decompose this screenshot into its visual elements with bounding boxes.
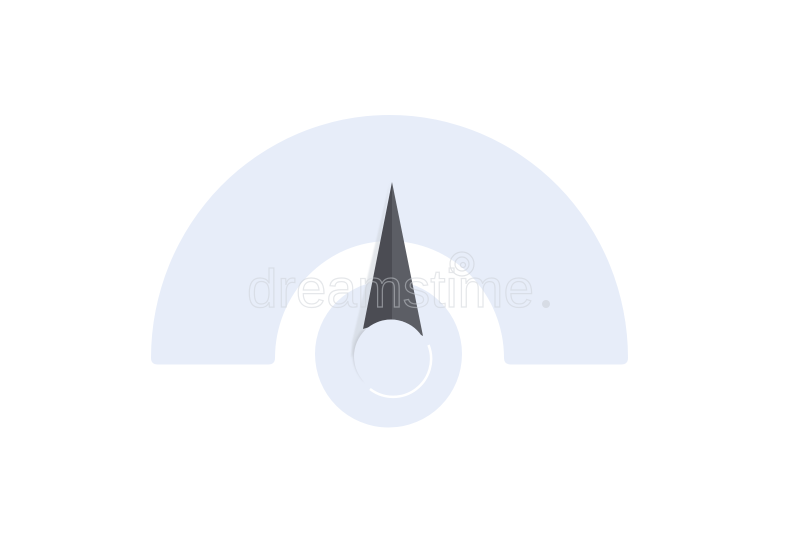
watermark registered mark — [450, 252, 474, 276]
watermark — [247, 252, 550, 319]
hub left shadow — [353, 330, 368, 381]
hub highlight ring — [370, 345, 431, 397]
watermark dot — [542, 300, 550, 308]
hub inner disc — [354, 320, 428, 394]
needle left face — [363, 182, 392, 329]
needle shadow — [351, 182, 390, 358]
needle right face — [392, 182, 423, 336]
hub outer disc — [315, 280, 462, 428]
needle — [363, 182, 423, 336]
gauge arc band — [151, 115, 628, 364]
watermark text: dreamstime — [247, 259, 534, 319]
